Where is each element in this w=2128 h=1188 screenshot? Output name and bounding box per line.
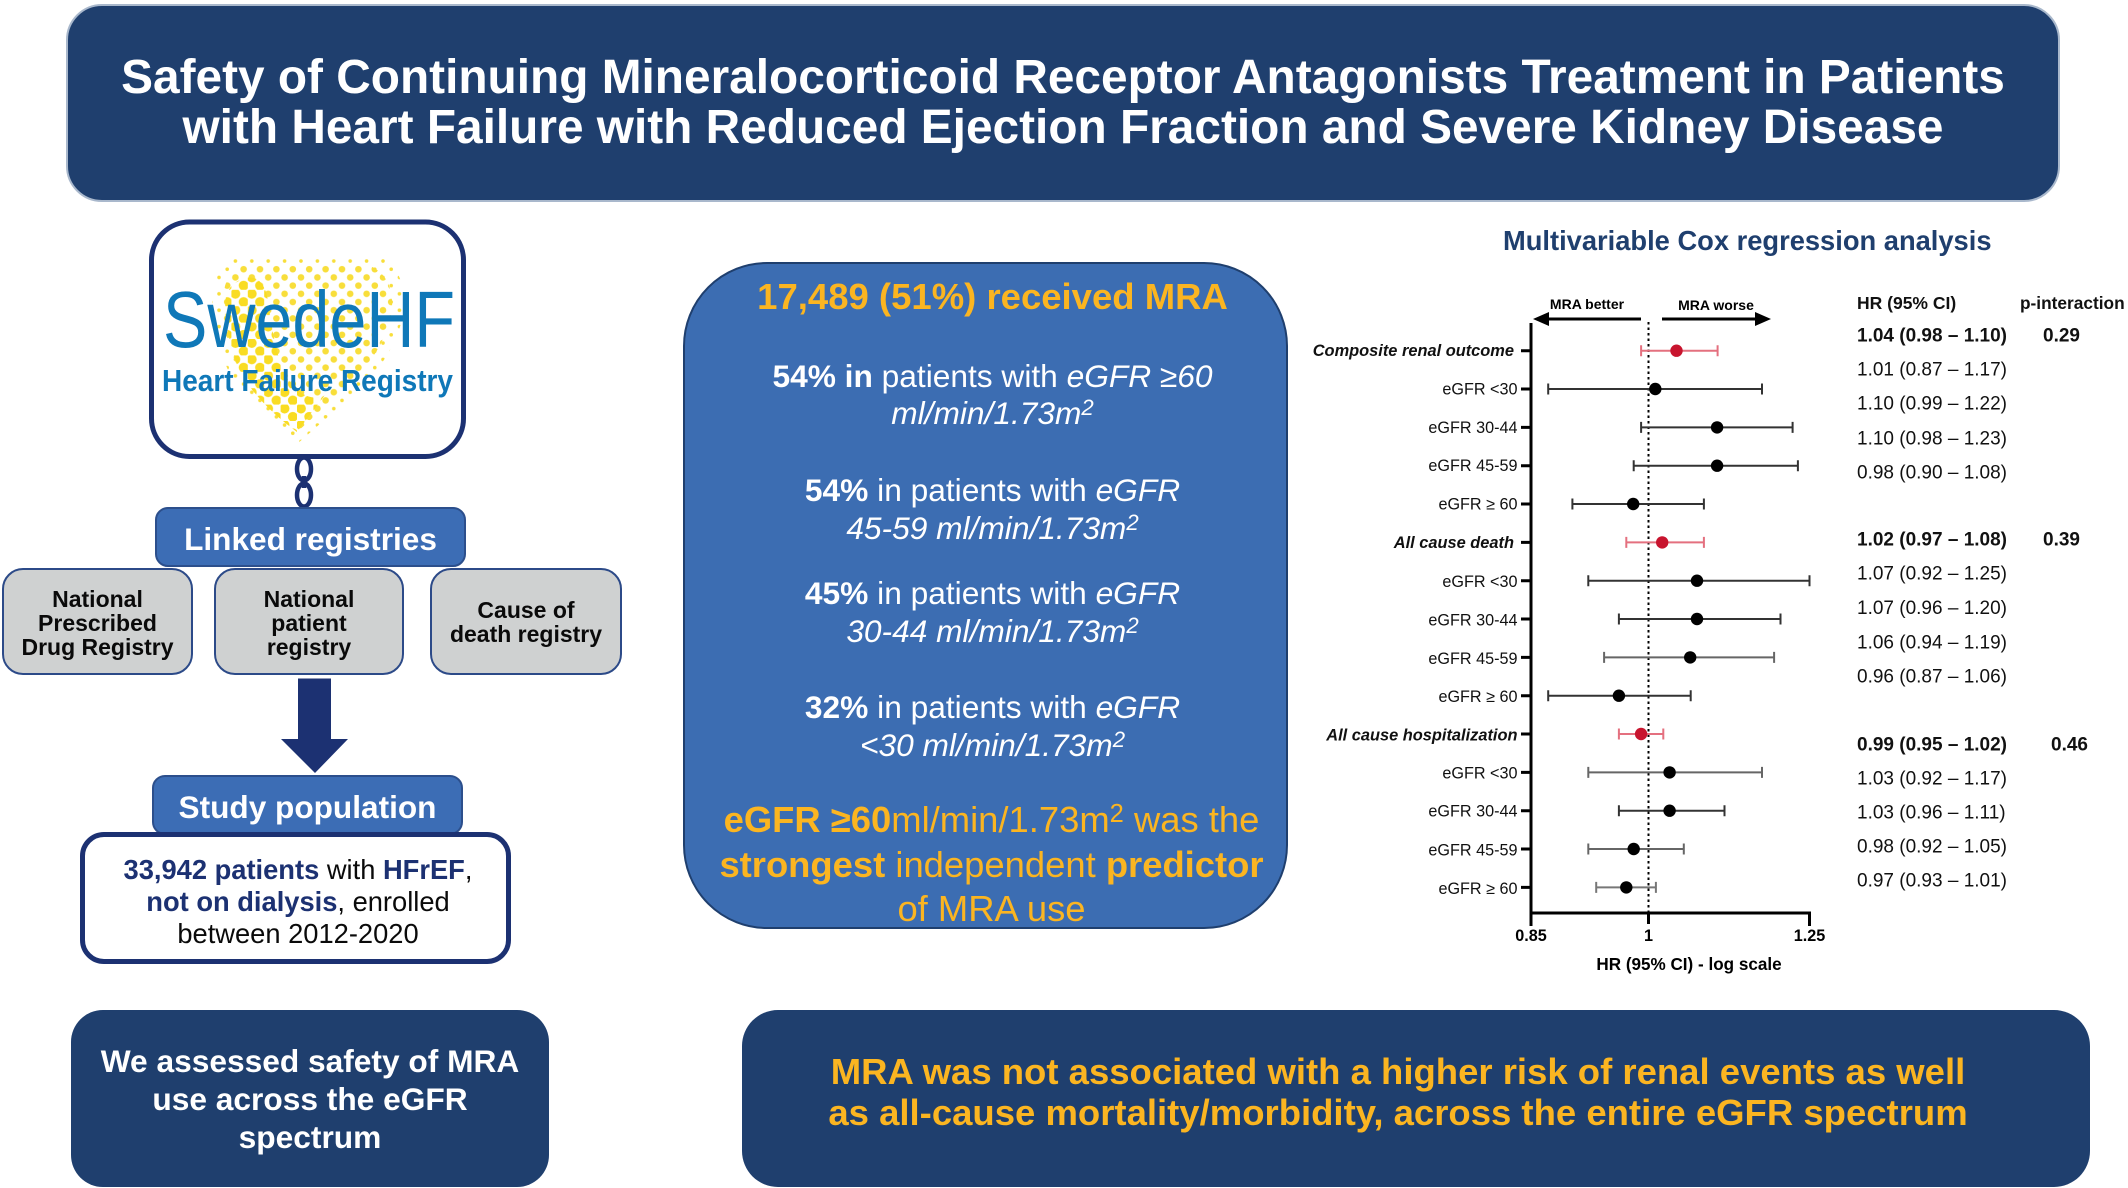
panel: study population details: between 2012-2020 xyxy=(177,918,419,949)
panel: assessment aim: use across the eGFR xyxy=(152,1081,468,1117)
heading: linked registries xyxy=(155,507,466,567)
row labels xyxy=(1313,342,1518,898)
row labels: eGFR 30-44 xyxy=(1428,612,1518,630)
text: eGFR 30-44: 45% in patients with eGFR xyxy=(805,575,1180,611)
row labels: eGFR 45-59 xyxy=(1428,650,1518,668)
text: eGFR 30-44 xyxy=(805,575,1180,649)
text: strongest predictor: strongest independent predictor xyxy=(719,844,1264,884)
table: hazard ratios: 1.06 (0.94 – 1.19) xyxy=(1857,632,2007,654)
text: eGFR under 30: 32% in patients with eGFR xyxy=(805,689,1180,725)
row labels: eGFR <30 xyxy=(1442,573,1518,591)
text: eGFR 30-44: 30-44 ml/min/1.73m2 xyxy=(846,613,1139,649)
text: eGFR under 30 xyxy=(805,689,1180,763)
table: p-interaction: p-interaction xyxy=(2020,293,2125,313)
table: hazard ratios: 0.98 (0.92 – 1.05) xyxy=(1857,836,2007,858)
axis labels: 0.85 xyxy=(1515,927,1547,945)
table: hazard ratios: 1.07 (0.92 – 1.25) xyxy=(1857,564,2007,584)
row labels: All cause death xyxy=(1393,534,1514,552)
table: p-interaction: 0.46 xyxy=(2051,734,2088,756)
title banner xyxy=(66,4,2060,202)
box: cause of death registry: Cause of xyxy=(477,597,575,623)
axis labels: 1.25 xyxy=(1794,927,1825,945)
row labels: eGFR 45-59 xyxy=(1428,457,1518,475)
table: hazard ratios: 1.10 (0.98 – 1.23) xyxy=(1857,428,2007,450)
panel: assessment aim: We assessed safety of MRA xyxy=(101,1043,519,1079)
table: hazard ratios: 1.03 (0.96 – 1.11) xyxy=(1857,802,2006,824)
text: eGFR 60 and above: 54% in patients with eGFR ≥60 xyxy=(772,358,1213,394)
heading: linked registries: Linked registries xyxy=(184,521,437,557)
table: hazard ratios: 0.99 (0.95 – 1.02) xyxy=(1857,734,2007,756)
hazard ratio points xyxy=(1613,344,1723,894)
row labels: eGFR ≥ 60 xyxy=(1438,496,1518,514)
arrow: MRA worse xyxy=(1662,297,1771,326)
heading: study population: Study population xyxy=(178,789,436,825)
table: p-interaction xyxy=(2020,293,2125,756)
table: hazard ratios: 0.98 (0.90 – 1.08) xyxy=(1857,462,2007,484)
panel: conclusion xyxy=(742,1010,2090,1187)
box: national patient registry xyxy=(214,568,404,675)
title banner: Safety of Continuing Mineralocorticoid Receptor Antagonists Treatment in Patients xyxy=(121,51,2005,104)
panel: conclusion: MRA was not associated with a higher risk of renal events as well xyxy=(831,1051,1965,1092)
table: hazard ratios: 1.02 (0.97 – 1.08) xyxy=(1857,530,2007,550)
axis labels xyxy=(1515,927,1825,974)
text: eGFR 45-59: 45-59 ml/min/1.73m2 xyxy=(846,510,1139,546)
forest plot xyxy=(1313,293,2125,974)
arrow: down to study population xyxy=(281,678,348,773)
confidence intervals xyxy=(1548,345,1810,893)
box: national patient registry: National xyxy=(264,586,354,612)
text: strongest predictor xyxy=(719,799,1264,929)
axis labels: HR (95% CI) - log scale xyxy=(1596,955,1782,974)
text: eGFR 45-59: 54% in patients with eGFR xyxy=(805,472,1180,508)
box: national prescribed drug registry: National xyxy=(52,586,143,612)
text: eGFR under 30: <30 ml/min/1.73m2 xyxy=(860,727,1125,763)
row labels: eGFR <30 xyxy=(1442,764,1518,782)
panel: study population details: 33,942 patients with HFrEF, xyxy=(124,854,472,885)
icon: chain link xyxy=(294,459,314,507)
table: hazard ratios: 0.97 (0.93 – 1.01) xyxy=(1857,870,2007,892)
row labels: Composite renal outcome xyxy=(1313,342,1514,360)
panel: study population details: not on dialysis, enrolled xyxy=(146,886,450,917)
arrow: MRA better: MRA better xyxy=(1550,296,1625,312)
box: cause of death registry: death registry xyxy=(450,621,602,647)
table: hazard ratios: HR (95% CI) xyxy=(1857,293,1956,313)
arrow: MRA better xyxy=(1533,296,1641,326)
row labels: All cause hospitalization xyxy=(1325,726,1518,744)
row labels: eGFR ≥ 60 xyxy=(1438,880,1518,898)
box: national prescribed drug registry: Drug Registry xyxy=(21,634,174,660)
text: eGFR 45-59 xyxy=(805,472,1180,546)
title banner: with Heart Failure with Reduced Ejection Fraction and Severe Kidney Disease xyxy=(182,101,1944,154)
text: eGFR 60 and above xyxy=(772,358,1213,431)
table: hazard ratios: 0.96 (0.87 – 1.06) xyxy=(1857,666,2007,688)
row labels: eGFR ≥ 60 xyxy=(1438,688,1518,706)
box: national prescribed drug registry xyxy=(2,568,193,675)
box: national patient registry: patient xyxy=(271,610,347,636)
panel: conclusion: as all-cause mortality/morbidity, across the entire eGFR spectrum xyxy=(828,1092,1968,1133)
row labels: eGFR 30-44 xyxy=(1428,802,1518,820)
table: p-interaction: 0.29 xyxy=(2043,326,2080,346)
box: cause of death registry xyxy=(430,568,622,675)
table: hazard ratios xyxy=(1857,293,2007,892)
panel: assessment aim xyxy=(71,1010,549,1187)
text: strongest predictor: of MRA use xyxy=(897,888,1086,929)
arrow: MRA worse: MRA worse xyxy=(1678,297,1754,313)
table: hazard ratios: 1.03 (0.92 – 1.17) xyxy=(1857,768,2007,790)
table: hazard ratios: 1.04 (0.98 – 1.10) xyxy=(1857,326,2007,346)
table: hazard ratios: 1.10 (0.99 – 1.22) xyxy=(1857,394,2007,414)
table: hazard ratios: 1.07 (0.96 – 1.20) xyxy=(1857,598,2007,619)
panel: MRA use by eGFR xyxy=(683,262,1288,929)
heading: study population xyxy=(152,775,463,835)
panel: assessment aim: spectrum xyxy=(239,1119,381,1155)
text: strongest predictor: eGFR ≥60ml/min/1.73m2 was the xyxy=(724,799,1259,840)
heading: Cox regression: Multivariable Cox regression analysis xyxy=(1503,225,1992,256)
box: national patient registry: registry xyxy=(267,634,351,660)
table: p-interaction: 0.39 xyxy=(2043,530,2080,550)
axis labels: 1 xyxy=(1644,927,1653,945)
row labels: eGFR 45-59 xyxy=(1428,842,1518,860)
panel: study population details xyxy=(80,832,511,964)
row labels: eGFR <30 xyxy=(1442,380,1518,398)
table: hazard ratios: 1.01 (0.87 – 1.17) xyxy=(1857,360,2007,380)
logo panel: SwedeHF xyxy=(149,220,466,459)
chart axes xyxy=(1521,322,1810,926)
box: national prescribed drug registry: Prescribed xyxy=(38,610,157,636)
heading: received MRA: 17,489 (51%) received MRA xyxy=(757,276,1228,317)
text: eGFR 60 and above: ml/min/1.73m2 xyxy=(891,395,1094,431)
row labels: eGFR 30-44 xyxy=(1428,419,1518,437)
